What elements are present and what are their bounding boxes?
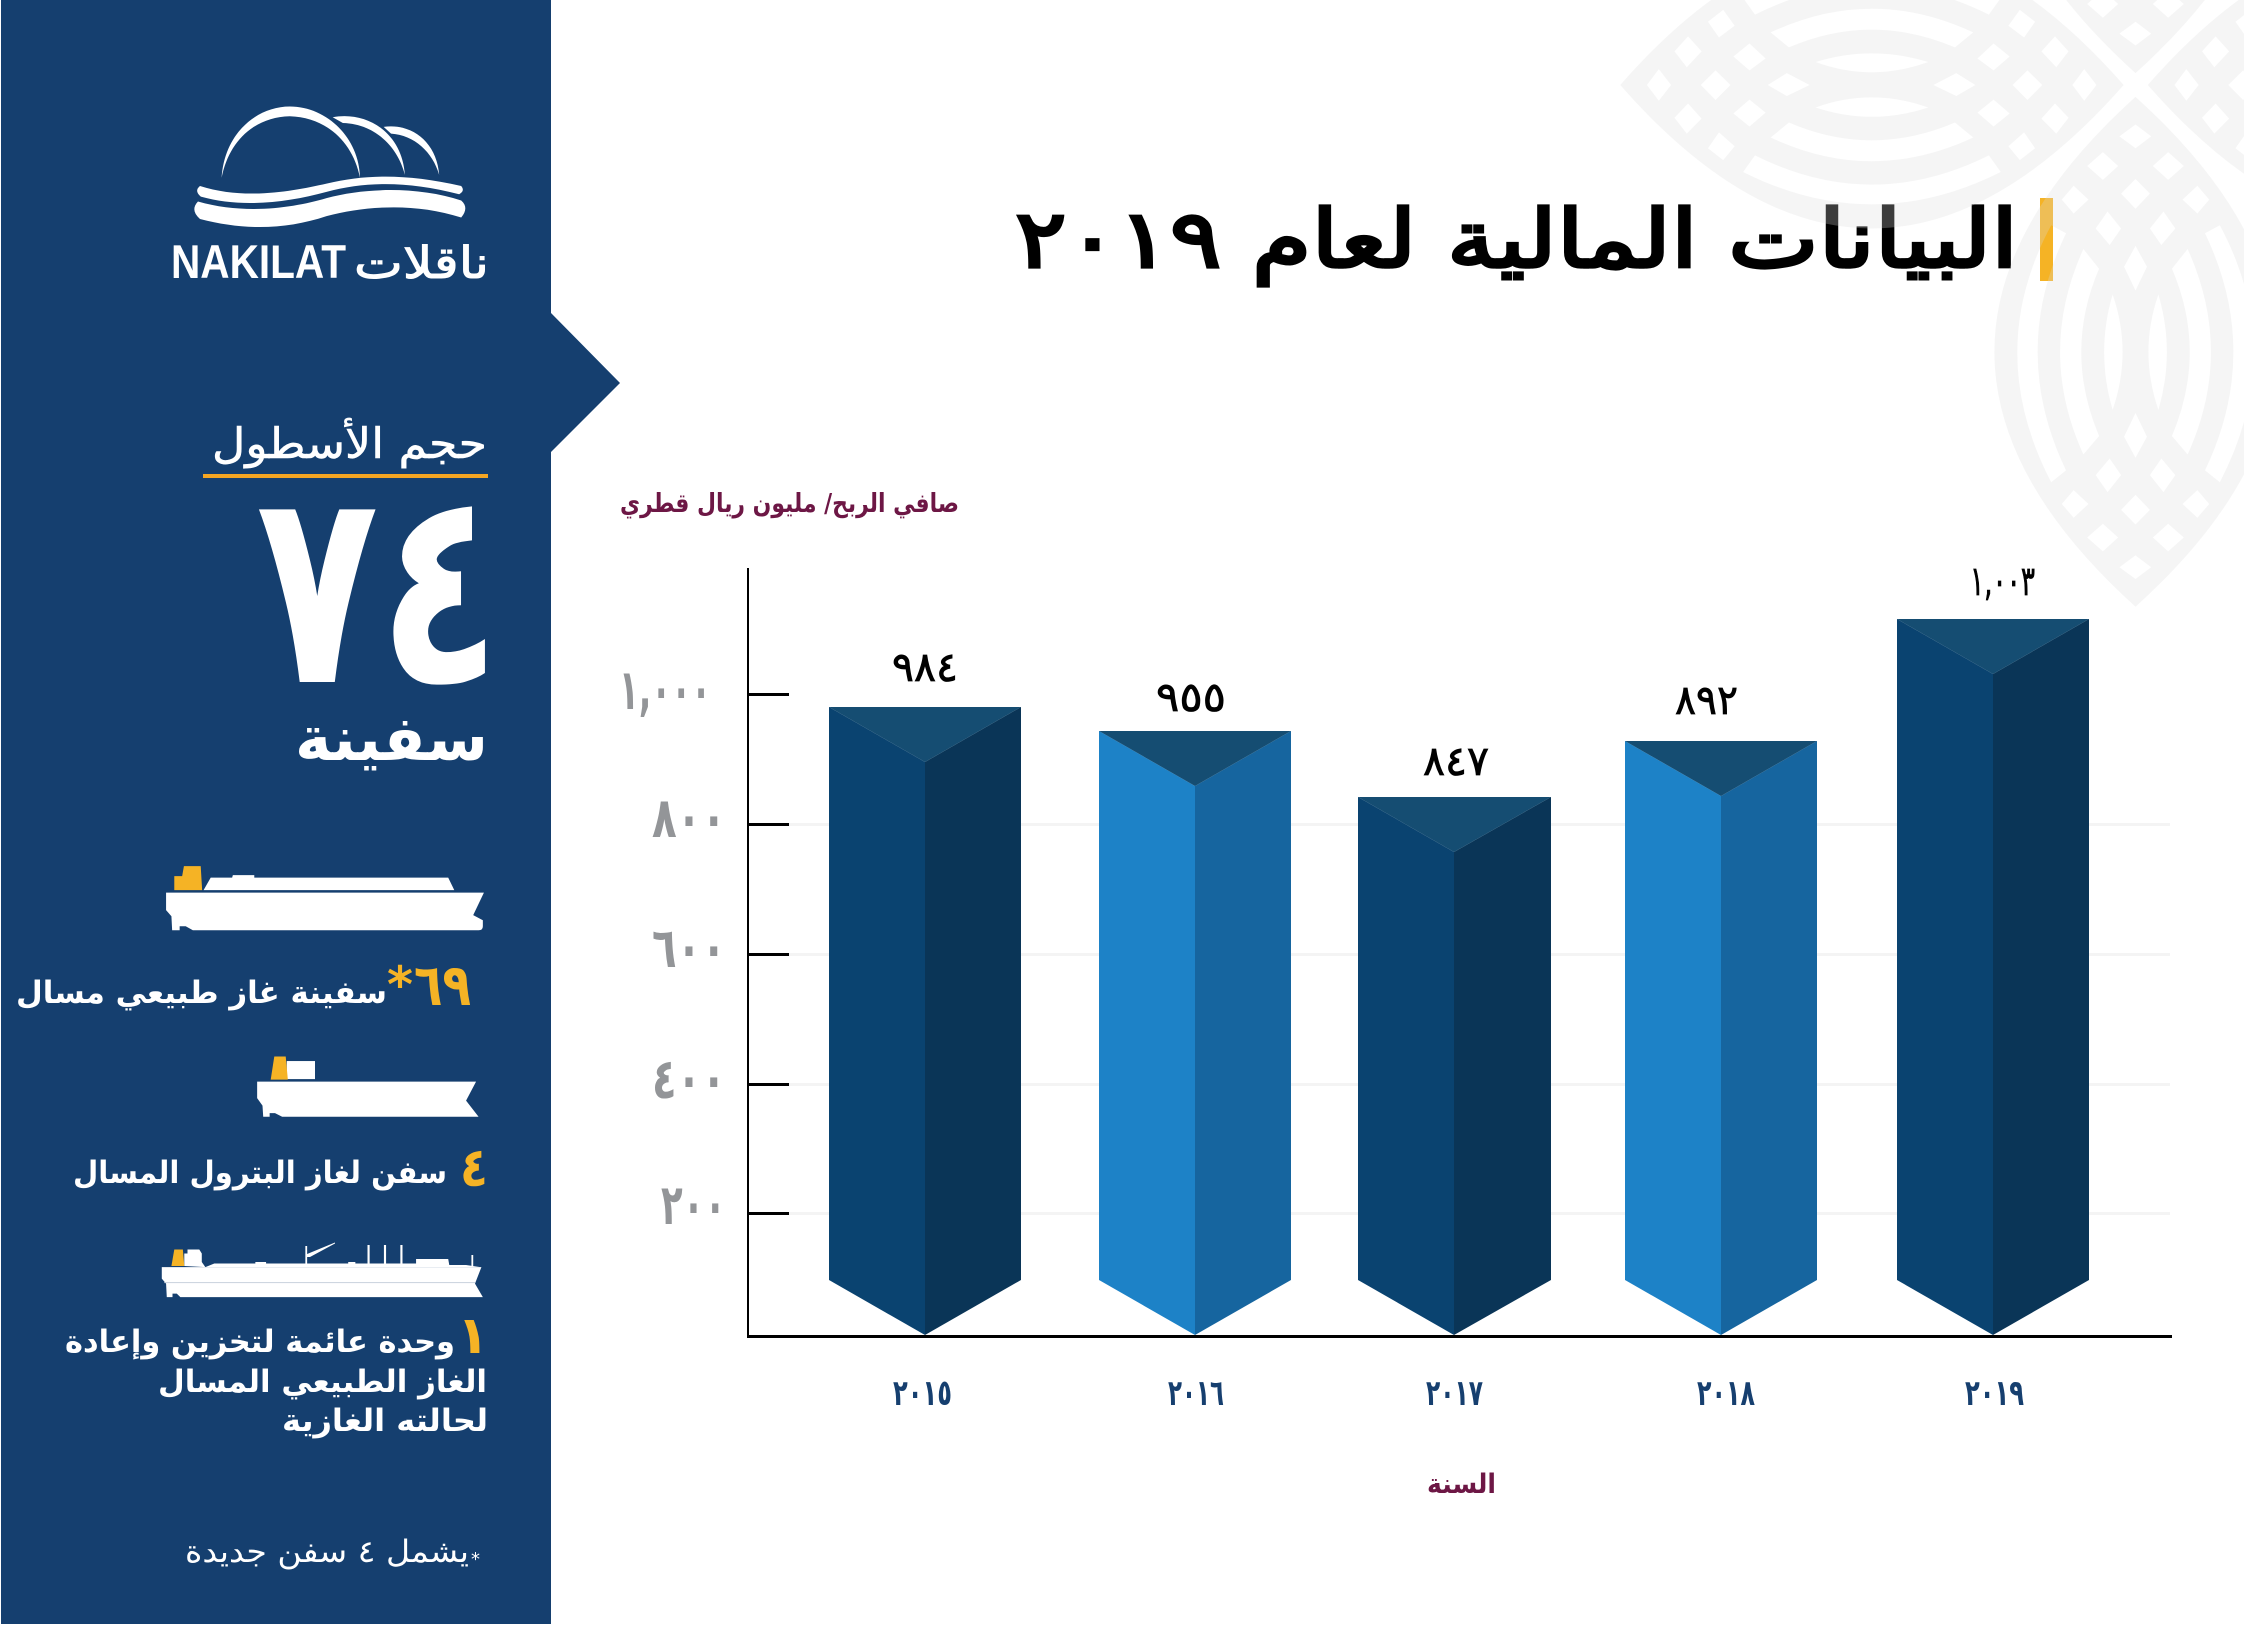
x axis labels: ٢٠١٥ bbox=[893, 1373, 952, 1414]
y axis title: صافي الربح/ مليون ريال قطري bbox=[620, 489, 959, 519]
icon: LNG carrier bbox=[166, 866, 484, 930]
bar: 2018 bbox=[1625, 676, 1817, 1335]
stat: 4 LPG vessels: سفن لغاز البترول المسال bbox=[73, 1155, 447, 1191]
stat: 4 LPG vessels: ٤ bbox=[460, 1136, 488, 1199]
footnote: يشمل ٤ سفن جديدة bbox=[185, 1534, 469, 1570]
bar: 2018: ٨٩٢ bbox=[1675, 676, 1738, 724]
x axis labels bbox=[893, 1373, 2024, 1414]
stat: 1 FSRU: وحدة عائمة لتخزين وإعادة bbox=[65, 1324, 455, 1360]
title accent bar bbox=[2040, 198, 2053, 281]
heading: fleet size: حجم الأسطول bbox=[212, 417, 487, 469]
stat: 1 FSRU bbox=[65, 1306, 489, 1439]
bar: 2016: ٩٥٥ bbox=[1156, 673, 1226, 721]
y axis: ٤٠٠ bbox=[652, 1047, 726, 1112]
bar: 2017: ٨٤٧ bbox=[1423, 737, 1489, 785]
bar chart: net profit bbox=[619, 557, 2172, 1414]
stat: 69 LNG vessels bbox=[16, 951, 471, 1019]
footnote: * bbox=[471, 1549, 480, 1570]
stat: 69 LNG vessels: * bbox=[387, 956, 413, 1014]
watermark: lattice pattern bbox=[1620, 0, 2244, 607]
label: ships: سفينة bbox=[295, 702, 488, 775]
x axis title: السنة bbox=[1427, 1469, 1496, 1500]
title: البيانات المالية لعام ٢٠١٩ bbox=[1015, 193, 2018, 286]
x axis labels: ٢٠١٧ bbox=[1426, 1373, 1483, 1414]
x axis labels: ٢٠١٩ bbox=[1965, 1373, 2024, 1414]
bar: 2019: ١,٠٠٣ bbox=[1970, 557, 2035, 605]
x axis labels: ٢٠١٨ bbox=[1697, 1373, 1755, 1414]
stat: 69 LNG vessels: سفينة غاز طبيعي مسال bbox=[16, 975, 387, 1011]
stat: 1 FSRU: ١ bbox=[457, 1306, 489, 1366]
bar: 2015: ٩٨٤ bbox=[892, 643, 958, 691]
panel: fleet sidebar bbox=[1, 0, 620, 1624]
y axis: ٢٠٠ bbox=[661, 1173, 726, 1238]
icon: LPG carrier bbox=[257, 1057, 479, 1117]
y axis: ٦٠٠ bbox=[652, 916, 726, 981]
bar: 2017 bbox=[1358, 737, 1551, 1335]
stat: 69 LNG vessels: ٦٩ bbox=[414, 951, 471, 1019]
x axis labels: ٢٠١٦ bbox=[1168, 1373, 1224, 1414]
stat: 1 FSRU: لحالته الغازية bbox=[282, 1403, 488, 1439]
stat: 1 FSRU: الغاز الطبيعي المسال bbox=[158, 1364, 487, 1400]
logo: Nakilat: ناقلات bbox=[354, 238, 489, 289]
icon: FSRU bbox=[162, 1243, 483, 1297]
bar: 2019 bbox=[1897, 557, 2089, 1335]
logo: Nakilat bbox=[171, 107, 489, 289]
logo: Nakilat: NAKILAT bbox=[171, 235, 346, 288]
y axis bbox=[619, 568, 789, 1337]
y axis: ٨٠٠ bbox=[652, 786, 726, 851]
stat: 4 LPG vessels bbox=[73, 1136, 488, 1199]
bar: 2015 bbox=[829, 643, 1021, 1335]
x axis bbox=[747, 1335, 2172, 1338]
y axis: ١,٠٠٠ bbox=[619, 658, 711, 723]
bar: 2016 bbox=[1099, 673, 1291, 1335]
big number: 74: ٧٤ bbox=[256, 431, 501, 747]
